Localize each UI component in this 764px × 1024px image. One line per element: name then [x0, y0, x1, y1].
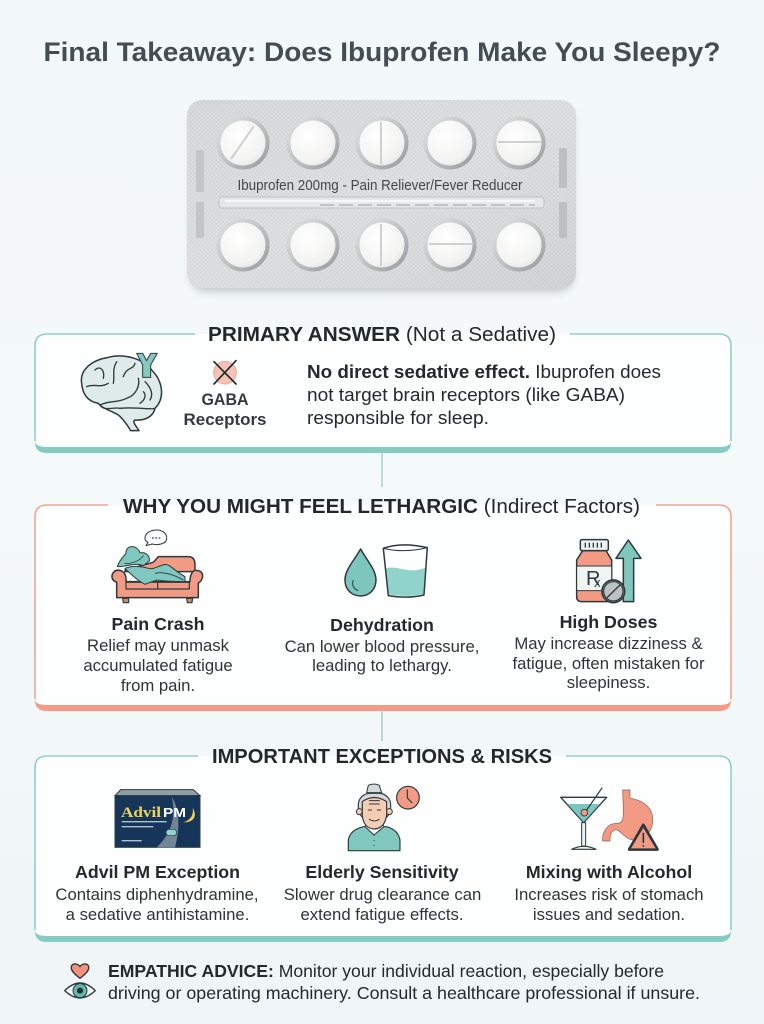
icon: brain with receptor [81, 353, 162, 431]
column: high doses: May increase dizziness & [514, 634, 703, 653]
label: Rx: R [586, 568, 600, 590]
icon: person on couch [112, 530, 203, 603]
text: primary answer body [307, 362, 661, 428]
column: advil PM exception: Contains diphenhydramine, [55, 885, 259, 904]
label: Advil PM brand: Advil [121, 805, 161, 821]
column: pain crash [83, 614, 233, 695]
icon: Advil PM box [115, 790, 200, 847]
column: dehydration [285, 615, 479, 675]
empathic advice callout [108, 961, 700, 1003]
column: high doses: High Doses [560, 612, 658, 632]
column: dehydration: Dehydration [330, 615, 434, 635]
panel: important exceptions and risks [35, 746, 731, 942]
panel: primary answer [35, 324, 731, 453]
column: pain crash: Pain Crash [112, 614, 204, 634]
heading: IMPORTANT EXCEPTIONS & RISKS [212, 746, 552, 768]
column: elderly sensitivity: Elderly Sensitivity [305, 862, 459, 882]
column: dehydration: leading to lethargy. [312, 656, 452, 675]
column: mixing with alcohol [514, 862, 704, 924]
icon: heart and eye [65, 964, 95, 998]
column: mixing with alcohol: Increases risk of stomach [514, 885, 704, 904]
icon: elderly person with clock [348, 784, 419, 851]
icon: pill bottle with arrow [577, 540, 641, 603]
connector lines [381, 453, 383, 741]
heading: PRIMARY ANSWER (Not a Sedative) [208, 324, 556, 346]
text: primary answer body: No direct sedative effect. Ibuprofen does [307, 362, 661, 382]
column: advil PM exception: a sedative antihistamine. [66, 905, 249, 924]
column: high doses [512, 612, 705, 692]
text: primary answer body: not target brain receptors (like GABA) [307, 385, 625, 405]
column: high doses: fatigue, often mistaken for [512, 654, 705, 673]
column: elderly sensitivity: Slower drug clearance can [284, 885, 481, 904]
label: Advil PM brand [121, 805, 186, 821]
label: GABA receptors [184, 390, 266, 429]
column: mixing with alcohol: issues and sedation. [533, 905, 685, 924]
label: Advil PM brand: PM [163, 805, 186, 820]
label: GABA receptors: GABA [202, 390, 248, 409]
blister pack of ibuprofen tablets [187, 100, 576, 292]
label: GABA receptors: Receptors [184, 410, 266, 429]
panel: why you might feel lethargic [35, 496, 731, 711]
icon: GABA receptors crossed out [214, 361, 236, 384]
column: advil PM exception [55, 862, 259, 924]
column: mixing with alcohol: Mixing with Alcohol [526, 862, 692, 882]
title: Final Takeaway: Does Ibuprofen Make You Sleepy? [44, 37, 720, 67]
empathic advice callout: EMPATHIC ADVICE: Monitor your individual reaction, especially before [108, 961, 664, 981]
empathic advice callout: driving or operating machinery. Consult a healthcare professional if unsure. [108, 983, 700, 1003]
column: pain crash: from pain. [121, 676, 195, 695]
column: dehydration: Can lower blood pressure, [285, 637, 479, 656]
column: high doses: sleepiness. [567, 673, 650, 692]
column: elderly sensitivity [284, 862, 481, 924]
icon: martini and stomach with warning [561, 788, 657, 849]
column: pain crash: accumulated fatigue [83, 656, 233, 675]
column: pain crash: Relief may unmask [87, 636, 230, 655]
column: elderly sensitivity: extend fatigue effects. [301, 905, 463, 924]
column: advil PM exception: Advil PM Exception [75, 862, 240, 882]
label: Rx: x [594, 575, 601, 590]
icon: water drop and glass [345, 545, 427, 597]
blister label: Ibuprofen 200mg - Pain Reliever/Fever Reducer [238, 177, 522, 194]
heading: WHY YOU MIGHT FEEL LETHARGIC (Indirect Factors) [123, 496, 640, 518]
text: primary answer body: responsible for sleep. [307, 408, 489, 428]
